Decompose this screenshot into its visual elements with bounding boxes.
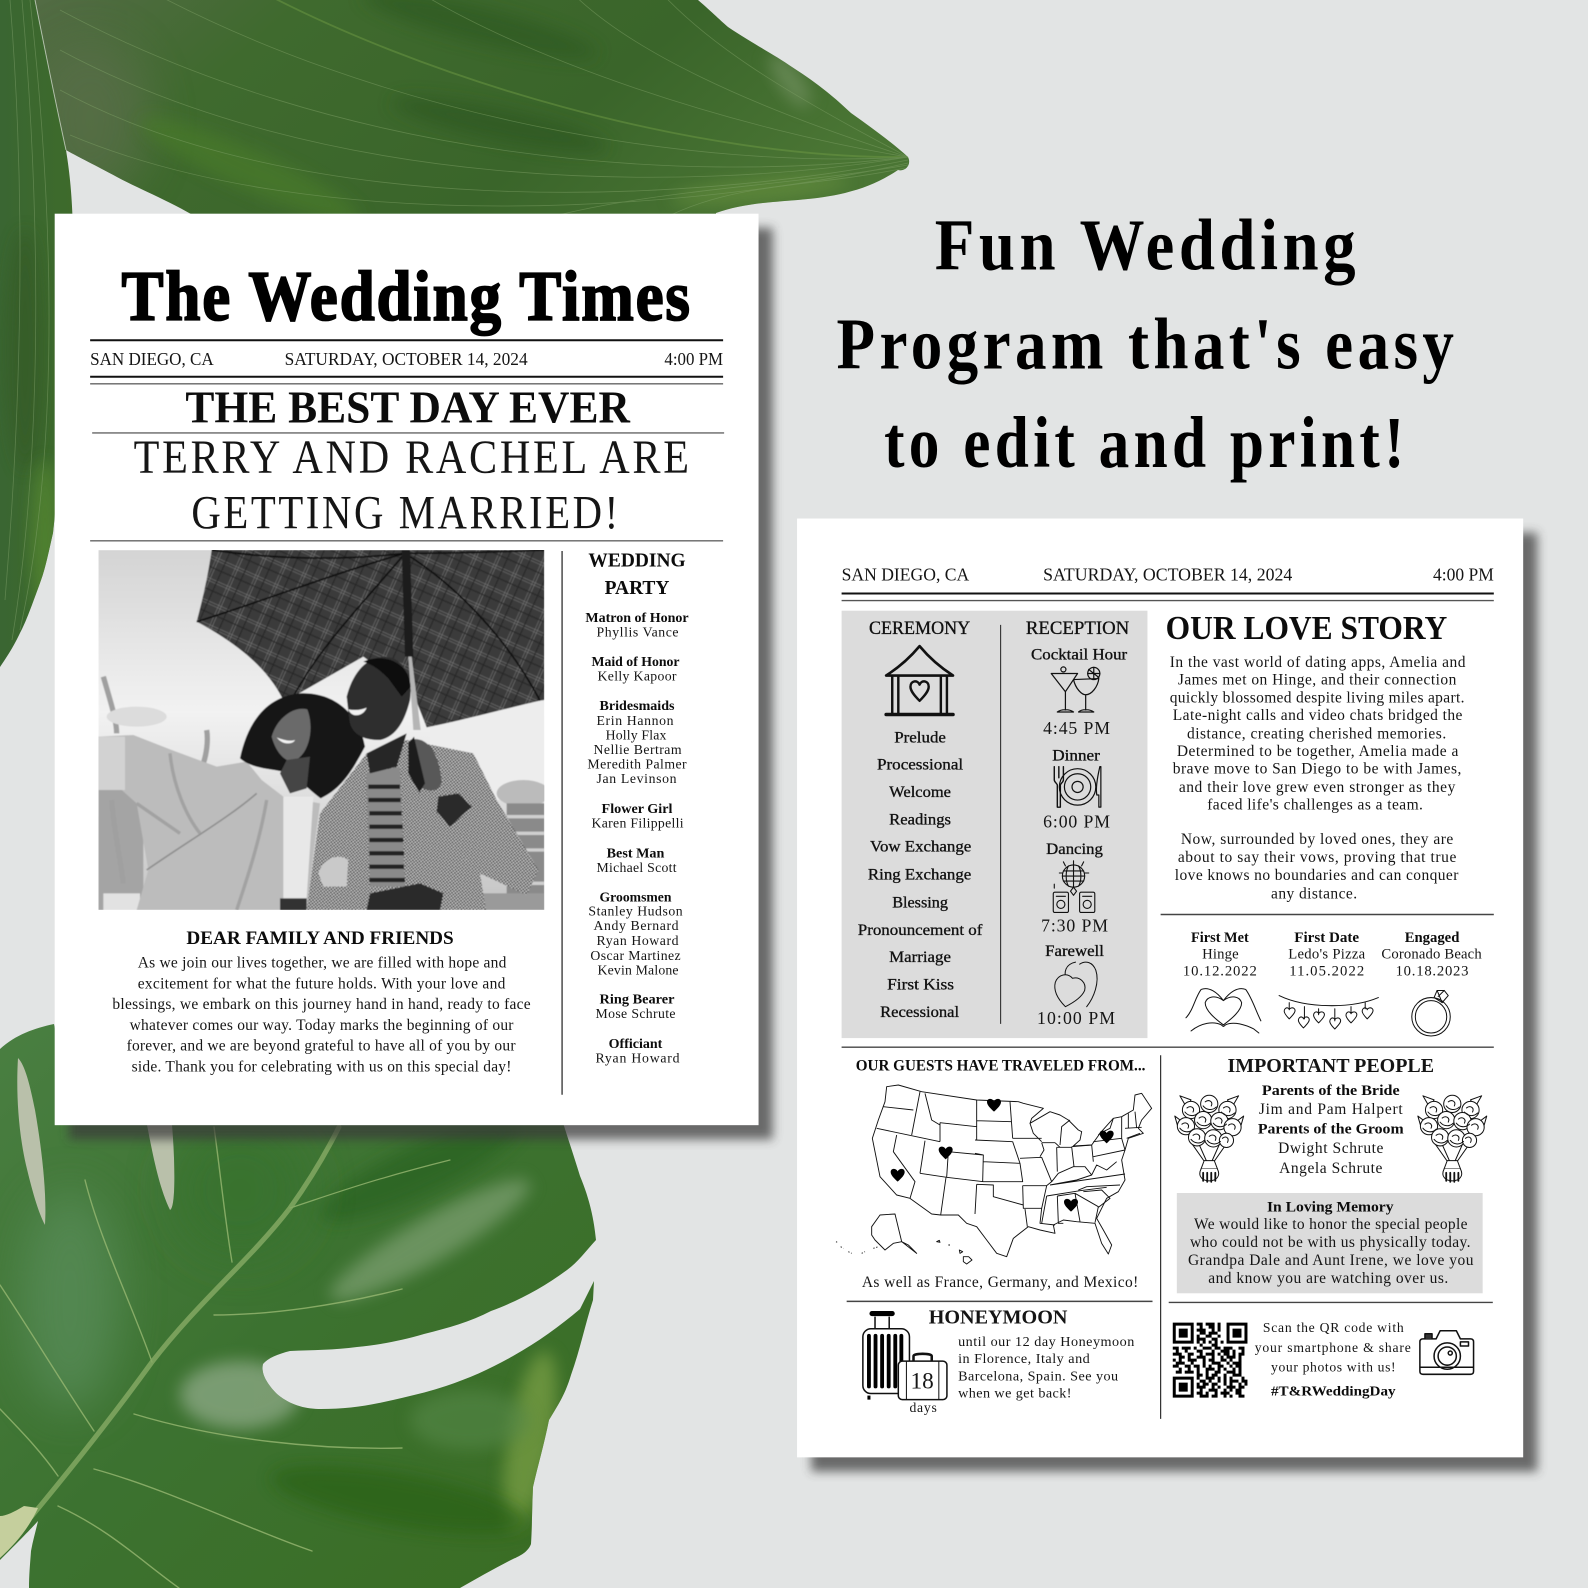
- reception schedule: Dinner: [1052, 748, 1101, 765]
- ceremony list: Readings: [889, 811, 951, 828]
- wedding party column: Karen Filippelli: [591, 815, 684, 830]
- man hand and handle: [409, 739, 442, 791]
- ceremony list: Ring Exchange: [868, 867, 971, 884]
- wedding party column: Andy Bernard: [593, 918, 679, 933]
- woman jacket: [98, 735, 320, 910]
- qr instructions: your smartphone & share: [1255, 1340, 1411, 1355]
- dateline: [842, 564, 1494, 584]
- milestones: Engaged: [1405, 930, 1459, 946]
- dateline: SAN DIEGO, CA: [90, 349, 214, 369]
- love story text: and their love grew even stronger as they: [1179, 779, 1456, 796]
- man shirt: [366, 767, 405, 887]
- important people names: [1258, 1082, 1404, 1177]
- dateline: 4:00 PM: [1433, 564, 1494, 584]
- wedding party column: Kelly Kapoor: [598, 669, 677, 684]
- honeymoon text: [958, 1334, 1134, 1402]
- panel: in loving memory: who could not be with us physically today.: [1190, 1234, 1471, 1251]
- dateline: SAN DIEGO, CA: [842, 564, 970, 584]
- ceremony list: Processional: [877, 757, 964, 774]
- icon: cocktails: [1051, 667, 1100, 712]
- reception schedule: 7:30 PM: [1041, 916, 1108, 936]
- arms: [318, 857, 348, 887]
- title: fun wedding program: Fun Wedding: [935, 204, 1360, 285]
- wedding party column: Phyllis Vance: [597, 625, 679, 640]
- wedding party column: Ryan Howard: [597, 933, 679, 948]
- wedding party column: Stanley Hudson: [588, 904, 683, 919]
- man jacket: [307, 740, 538, 910]
- wedding party column: Jan Levinson: [597, 771, 677, 786]
- panel: in loving memory: In Loving Memory: [1267, 1199, 1394, 1215]
- ceremony heading: CEREMONY: [869, 618, 970, 639]
- map: united states with hearts: [836, 1085, 1152, 1264]
- love story text: about to say their vows, proving that true: [1178, 849, 1456, 866]
- wedding party column: Mose Schrute: [596, 1006, 676, 1021]
- letter body: forever, and we are beyond grateful to have all of you by our: [127, 1038, 516, 1055]
- ceremony list: Welcome: [889, 784, 951, 801]
- title: fun wedding program: to edit and print!: [884, 402, 1409, 483]
- wedding party column: Maid of Honor: [591, 654, 680, 669]
- ceremony list: Marriage: [889, 949, 951, 966]
- honeymoon text: until our 12 day Honeymoon: [958, 1334, 1134, 1350]
- header rules: [90, 340, 724, 541]
- ceremony list: [858, 729, 983, 1021]
- milestones: Ledo's Pizza: [1288, 947, 1366, 963]
- important people names: Jim and Pam Halpert: [1259, 1101, 1403, 1118]
- love story text: distance, creating cherished memories.: [1187, 725, 1446, 742]
- honeymoon text: Barcelona, Spain. See you: [958, 1368, 1118, 1384]
- icon: luggage with countdown: [863, 1314, 947, 1415]
- milestones: Hinge: [1202, 947, 1239, 963]
- ceremony list: Blessing: [892, 894, 948, 911]
- icon: bouquet right: [1418, 1095, 1487, 1182]
- honeymoon text: in Florence, Italy and: [958, 1351, 1090, 1367]
- woman face: [272, 709, 311, 762]
- masthead title: The Wedding Times: [122, 258, 692, 336]
- wedding party column: Bridesmaids: [600, 698, 675, 713]
- wedding party column: Nellie Bertram: [593, 742, 682, 757]
- love story text: James met on Hinge, and their connection: [1178, 672, 1457, 689]
- important people names: Dwight Schrute: [1278, 1140, 1384, 1157]
- icon: ring: [1412, 990, 1450, 1036]
- letter body: excitement for what the future holds. With your love and: [138, 975, 506, 992]
- wedding party column: Holly Flax: [606, 727, 667, 742]
- panel: newspaper back page: [797, 519, 1523, 1457]
- panel: in loving memory: Grandpa Dale and Aunt Irene, we love you: [1188, 1252, 1474, 1269]
- milestones: [1183, 930, 1482, 979]
- icon: two hearts: [1055, 962, 1097, 1007]
- milestones: 10.18.2023: [1396, 963, 1468, 979]
- letter body: As we join our lives together, we are filled with hope and: [138, 955, 507, 972]
- leaf: monstera: [0, 1010, 610, 1588]
- panel: in loving memory: [1177, 1193, 1483, 1293]
- dateline: SATURDAY, OCTOBER 14, 2024: [285, 349, 528, 369]
- milestones: 10.12.2022: [1183, 963, 1257, 979]
- title: fun wedding program: [837, 204, 1458, 483]
- love story text: Late-night calls and video chats bridged the: [1173, 707, 1463, 724]
- love story text: any distance.: [1271, 885, 1357, 902]
- woman hair: [240, 693, 365, 798]
- headline: THE BEST DAY EVER: [185, 381, 631, 432]
- wedding party column: Best Man: [607, 845, 665, 860]
- wedding party column: Flower Girl: [602, 801, 673, 816]
- dateline: [90, 349, 723, 369]
- column divider: [561, 551, 563, 1095]
- subheadline: GETTING MARRIED!: [191, 488, 621, 540]
- reception schedule: 10:00 PM: [1037, 1008, 1115, 1028]
- panel: newspaper front page: [55, 214, 759, 1125]
- wedding party column: Ryan Howard: [596, 1050, 680, 1065]
- dateline: 4:00 PM: [664, 349, 723, 369]
- wedding party column: [585, 550, 689, 1065]
- man head: [347, 657, 411, 740]
- wedding party column: Meredith Palmer: [587, 757, 687, 772]
- icon: heart hands: [1186, 989, 1261, 1033]
- love story text: Determined to be together, Amelia made a: [1177, 743, 1458, 760]
- letter body: whatever comes our way. Today marks the beginning of our: [130, 1017, 514, 1034]
- reception schedule: Cocktail Hour: [1031, 646, 1128, 663]
- love story heading: OUR LOVE STORY: [1166, 610, 1447, 647]
- reception schedule: Farewell: [1045, 943, 1105, 960]
- umbrella: [197, 550, 544, 727]
- reception heading: RECEPTION: [1026, 618, 1129, 639]
- milestones: First Date: [1294, 930, 1360, 946]
- ceremony list: First Kiss: [887, 976, 954, 993]
- icon: bouquet left: [1175, 1095, 1244, 1182]
- icon: heart bunting: [1279, 996, 1378, 1029]
- love story text: faced life's challenges as a team.: [1207, 797, 1423, 814]
- love story text: Now, surrounded by loved ones, they are: [1181, 831, 1453, 848]
- dateline: SATURDAY, OCTOBER 14, 2024: [1043, 564, 1292, 584]
- qr instructions: [1255, 1320, 1411, 1400]
- card shadows: [69, 228, 1537, 1472]
- ceremony list: Recessional: [880, 1004, 960, 1021]
- love story text: quickly blossomed despite living miles apart.: [1170, 689, 1464, 706]
- important people names: Angela Schrute: [1279, 1160, 1383, 1177]
- important people names: Parents of the Bride: [1262, 1082, 1400, 1099]
- honeymoon text: when we get back!: [958, 1386, 1071, 1402]
- ceremony list: Prelude: [894, 729, 946, 746]
- panel: in loving memory: We would like to honor the special people: [1194, 1216, 1468, 1233]
- ceremony list: Pronouncement of: [858, 922, 983, 939]
- leaf: top foliage: [35, 0, 910, 214]
- reception schedule: Dancing: [1046, 841, 1103, 858]
- icon: luggage with countdown: days: [909, 1400, 937, 1415]
- love story text: [1170, 654, 1466, 902]
- reception schedule: 4:45 PM: [1043, 718, 1110, 738]
- milestones: Coronado Beach: [1381, 947, 1482, 963]
- wedding party column: Michael Scott: [597, 860, 677, 875]
- guests heading: OUR GUESTS HAVE TRAVELED FROM...: [856, 1057, 1145, 1074]
- wedding party column: Erin Hannon: [597, 713, 674, 728]
- letter body: blessings, we embark on this journey hand in hand, ready to face: [112, 996, 531, 1013]
- subheadline: [134, 432, 692, 540]
- photo: couple under umbrella: [98, 550, 550, 910]
- love story text: brave move to San Diego to be with James,: [1173, 761, 1461, 778]
- panel: in loving memory: and know you are watching over us.: [1208, 1270, 1448, 1287]
- qr instructions: #T&RWeddingDay: [1271, 1384, 1396, 1400]
- title: fun wedding program: Program that's easy: [837, 304, 1458, 385]
- reception schedule: 6:00 PM: [1043, 811, 1110, 831]
- leaf stem: [0, 1506, 38, 1558]
- important people heading: IMPORTANT PEOPLE: [1227, 1055, 1434, 1077]
- wedding party column: Kevin Malone: [598, 962, 679, 977]
- qr instructions: your photos with us!: [1271, 1359, 1396, 1374]
- wedding party column: Officiant: [609, 1036, 663, 1051]
- wedding party column: Oscar Martinez: [590, 948, 681, 963]
- love story text: In the vast world of dating apps, Amelia and: [1170, 654, 1466, 671]
- wedding party column: PARTY: [605, 577, 670, 599]
- ceremony list: Vow Exchange: [870, 839, 971, 856]
- icon: camera: [1420, 1331, 1474, 1374]
- wedding party column: Ring Bearer: [600, 992, 674, 1007]
- icon: luggage with countdown: 18: [910, 1368, 934, 1394]
- wedding party column: WEDDING: [588, 550, 686, 572]
- honeymoon heading: HONEYMOON: [929, 1307, 1068, 1329]
- panel: order of events: [842, 611, 1147, 1038]
- love story text: love knows no boundaries and can conquer: [1175, 867, 1459, 884]
- letter heading: DEAR FAMILY AND FRIENDS: [186, 928, 454, 949]
- qr instructions: Scan the QR code with: [1263, 1320, 1404, 1335]
- letter body: side. Thank you for celebrating with us on this special day!: [132, 1058, 511, 1075]
- icon: arbour: [886, 646, 953, 714]
- wedding party column: Groomsmen: [600, 889, 672, 904]
- qr code: [1173, 1324, 1247, 1396]
- reception schedule: [1031, 646, 1128, 1028]
- milestones: First Met: [1191, 930, 1249, 946]
- letter body: [112, 955, 531, 1075]
- subheadline: TERRY AND RACHEL ARE: [134, 432, 692, 484]
- icon: place setting: [1054, 767, 1101, 807]
- icon: disco and speakers: [1053, 861, 1095, 912]
- leaf: left edge foliage: [0, 0, 72, 667]
- wedding party column: Matron of Honor: [585, 610, 689, 625]
- map caption: As well as France, Germany, and Mexico!: [862, 1274, 1138, 1291]
- milestones: 11.05.2022: [1289, 963, 1364, 979]
- important people names: Parents of the Groom: [1258, 1120, 1404, 1137]
